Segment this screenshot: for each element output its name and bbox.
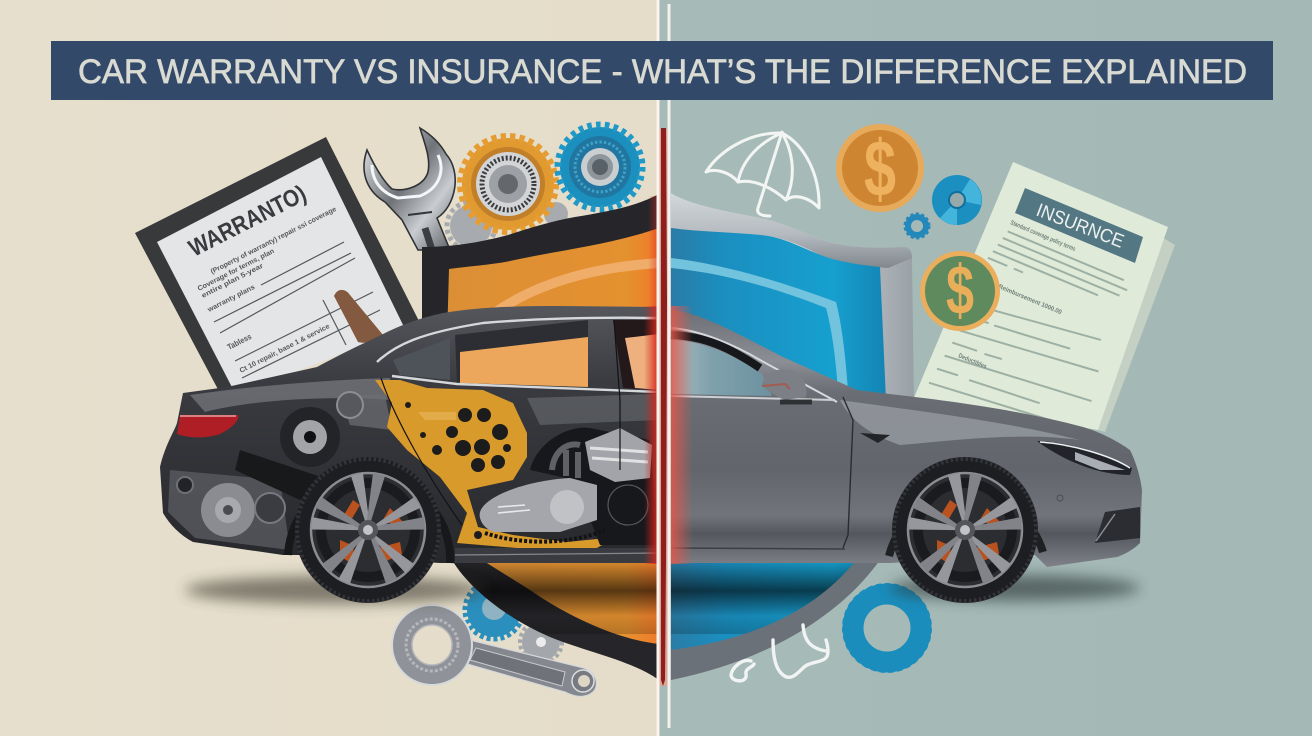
headlight	[1037, 441, 1132, 475]
warranty document fine print: entire plan 5-year	[201, 263, 265, 300]
icon: green dollar coin	[920, 251, 1000, 331]
rear ghost panel highlight	[190, 378, 392, 412]
icon: grey gear behind	[447, 202, 568, 250]
title text: CAR WARRANTY VS INSURANCE - WHAT’S THE DIFFERENCE EXPLAINED	[78, 53, 1247, 91]
fender side vent	[860, 433, 890, 443]
cutaway body	[160, 306, 659, 563]
car: warranty cutaway half	[160, 306, 659, 563]
warranty document heading: WARRANTO)	[184, 180, 311, 262]
panel: warranty half of shield	[422, 194, 659, 680]
painted body	[671, 310, 1142, 567]
warranty shield shadow band	[452, 562, 659, 634]
centre divider glow on car left	[644, 306, 658, 564]
centre divider glow on car right	[671, 306, 693, 564]
icon: orange dollar coin: $	[864, 124, 896, 213]
centre divider left white line	[656, 0, 660, 736]
panel: warranty side background	[0, 0, 659, 736]
warranty document fine print: warranty plans	[206, 284, 256, 314]
lower front vent	[1095, 507, 1140, 543]
panel: insurance side background	[659, 0, 1312, 736]
warranty document fine print: Ct 10 repair, base 1 & service	[239, 323, 331, 375]
rear wheel arch	[288, 478, 450, 563]
chrome window trim	[377, 318, 659, 392]
icon: lower blue gear right	[845, 586, 929, 670]
x-ray streak behind door	[527, 394, 657, 425]
front door window	[613, 320, 659, 390]
insurance document subheadings: Deductibles	[957, 352, 988, 371]
icon: blue gear	[558, 125, 642, 209]
rear quarter window	[393, 338, 450, 380]
centre divider red core	[661, 128, 667, 686]
hood highlight	[840, 400, 1080, 445]
pen on document	[334, 290, 383, 343]
icon: small blue gear	[905, 214, 929, 238]
panel: insurance half of shield	[671, 193, 914, 680]
car: insurance finished half	[671, 310, 1142, 567]
insurance document	[913, 162, 1175, 445]
insurance banner: INSURNCE	[1033, 200, 1127, 253]
rear speaker component	[280, 407, 340, 467]
icon: blue disc	[932, 175, 982, 225]
window trim	[671, 328, 837, 402]
icon: green dollar coin: $	[946, 251, 974, 329]
insurance document subheadings: Reimbursement 1000.00	[997, 283, 1063, 316]
icon: orange gear	[461, 137, 555, 231]
front window glass	[671, 340, 772, 396]
icon: orange dollar coin	[836, 124, 924, 213]
icon: lower blue gear left	[465, 581, 523, 639]
warranty document fine print: Tabless	[226, 332, 254, 352]
side mirror	[762, 370, 812, 402]
insurance shield shadow band	[671, 562, 881, 634]
centre divider left gap	[659, 130, 670, 686]
rear clutch component	[177, 392, 363, 537]
rear door window	[455, 320, 588, 387]
lower door crease	[671, 548, 845, 549]
sill strip	[455, 548, 659, 563]
door shut line	[843, 397, 853, 548]
rear car ground shadow	[185, 576, 485, 604]
icon: umbrella outline	[706, 132, 819, 216]
icon: lower spanner	[392, 605, 596, 697]
title banner	[51, 41, 1273, 100]
insurance document subheadings: Standard coverage policy terms	[1009, 219, 1077, 253]
yellow gear cutaway panel	[375, 380, 617, 550]
car: front wheel	[892, 457, 1038, 603]
icon: lower grey gear	[520, 621, 562, 663]
icon: white squiggle outline	[731, 625, 828, 681]
front wheel arch	[889, 496, 1043, 556]
insurance banner	[1015, 188, 1143, 263]
centre divider glow on shield left	[648, 196, 658, 306]
engine block	[480, 428, 659, 545]
tail light	[177, 415, 238, 437]
icon: silver wrench	[364, 128, 455, 250]
sensor dot	[1057, 495, 1063, 501]
warranty document fine print: (Property of warranty) repair ssi coverage	[210, 206, 338, 276]
door shut line	[381, 320, 620, 525]
insurance document subheadings	[957, 219, 1077, 371]
centre divider right white line	[668, 4, 670, 728]
insurance document text lines	[929, 226, 1144, 445]
car: rear wheel	[295, 457, 441, 603]
warranty document on tablet	[135, 137, 420, 395]
warranty document fine print	[197, 206, 338, 375]
warranty document fine print: Coverage for terms, plan	[197, 248, 276, 293]
front car ground shadow	[890, 575, 1140, 601]
